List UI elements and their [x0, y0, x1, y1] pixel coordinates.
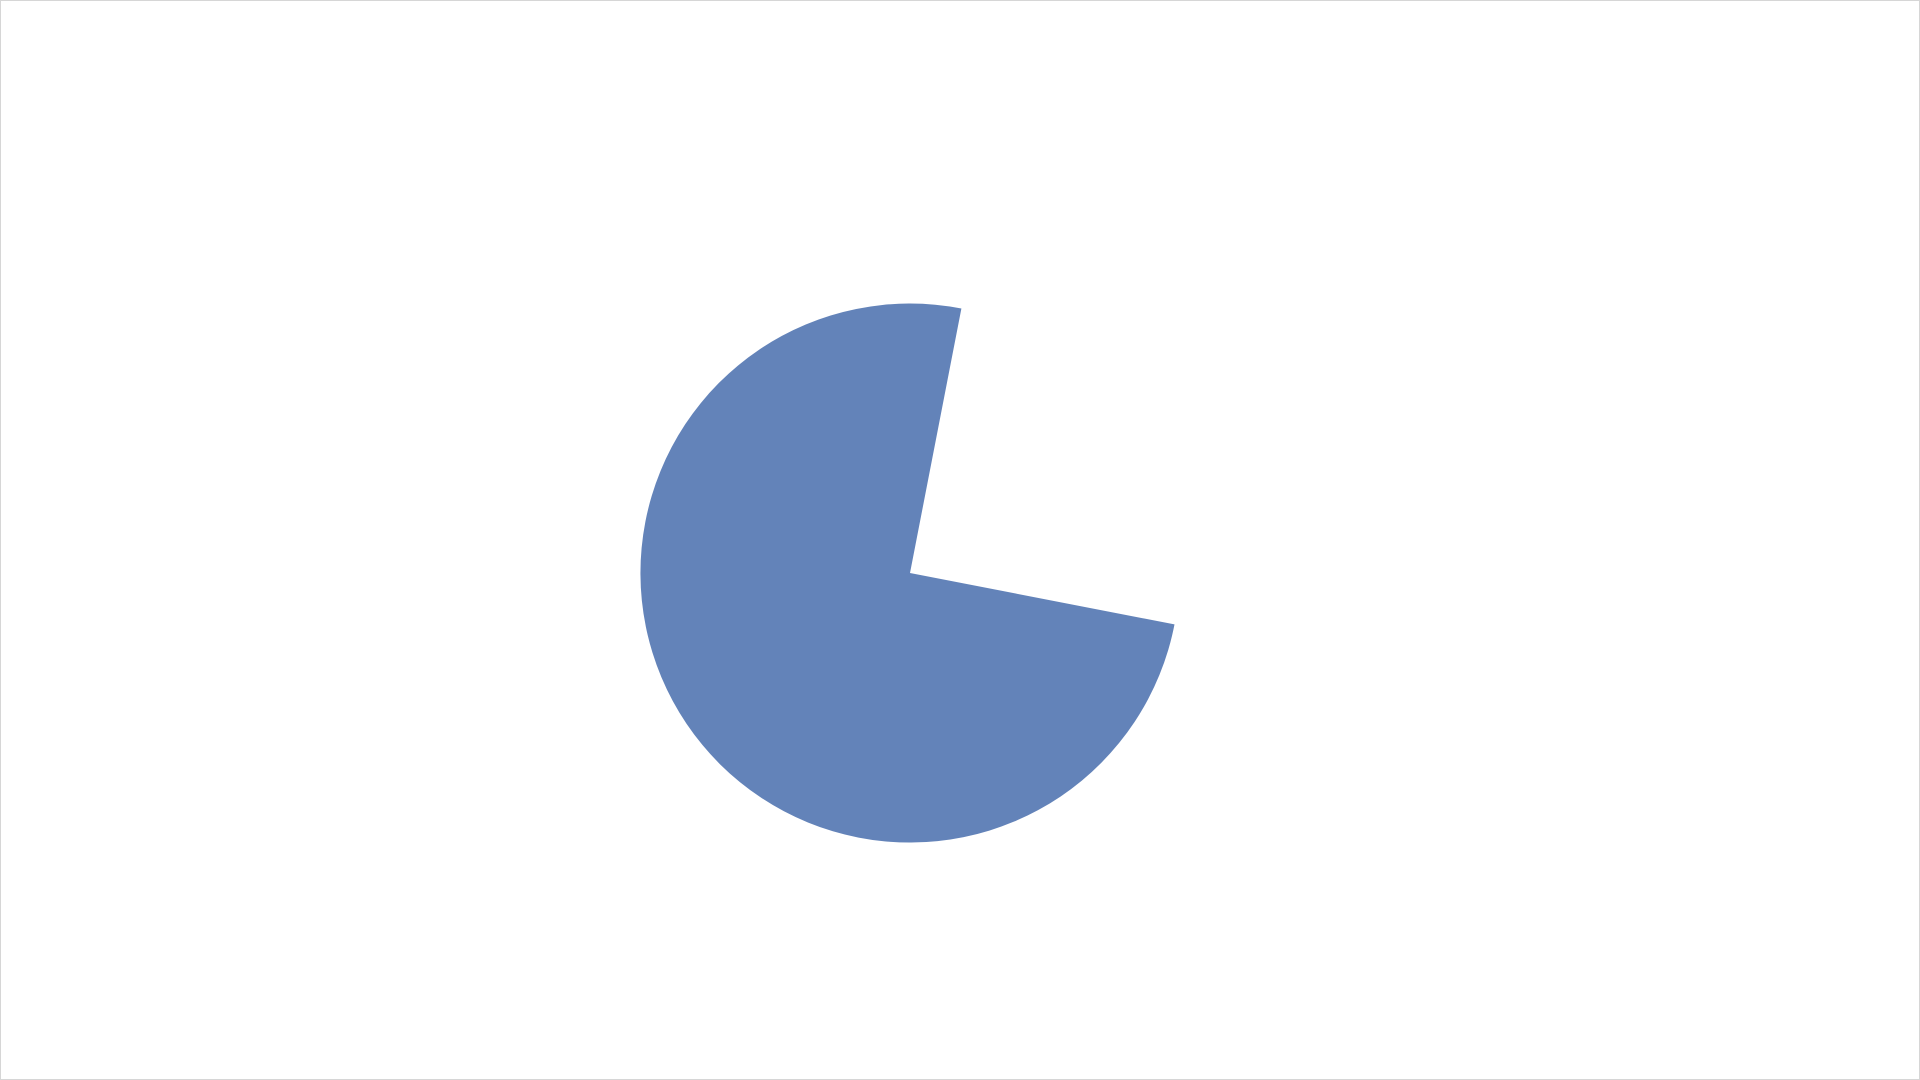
pie chart: single sector with missing wedge [640, 304, 1174, 843]
